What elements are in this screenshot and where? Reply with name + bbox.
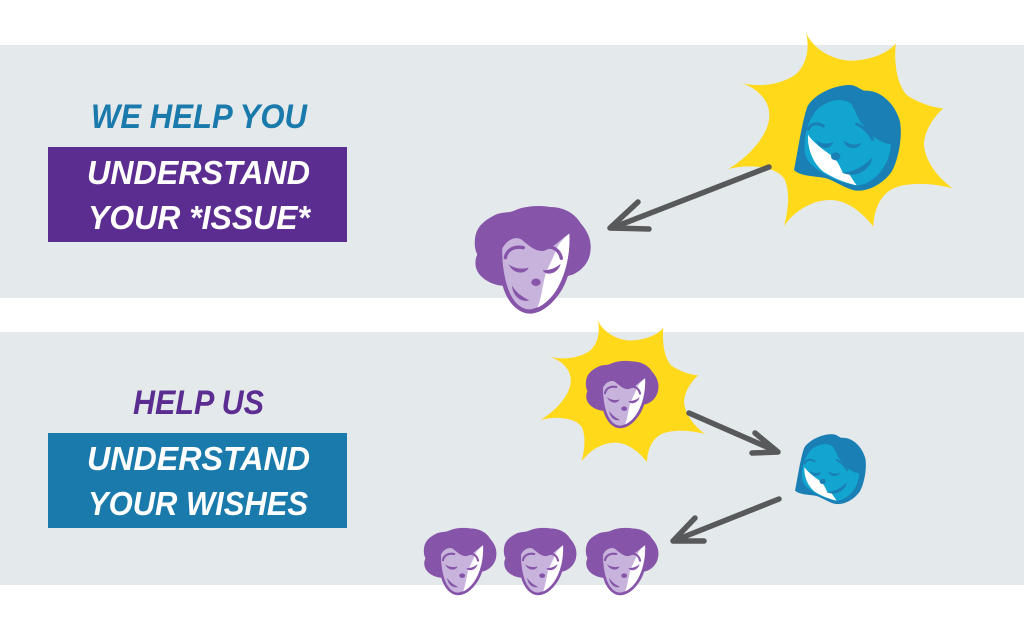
arrow: blue face to purple group xyxy=(673,499,779,541)
arrow: blue face to purple face xyxy=(610,167,769,229)
icon: purple face group xyxy=(424,528,658,595)
icon: blue face in large sun xyxy=(728,33,953,227)
arrow: purple face to blue face xyxy=(689,413,778,453)
heading: help us: HELP US xyxy=(133,384,264,422)
icon: sun behind small purple face xyxy=(541,320,705,462)
callout: understand your issue: YOUR *ISSUE* xyxy=(88,199,312,236)
callout: understand your wishes: YOUR WISHES xyxy=(88,485,308,522)
icon: purple face in small sun xyxy=(586,361,658,428)
callout: understand your issue: UNDERSTAND xyxy=(87,154,310,191)
icon: small blue face xyxy=(795,434,866,504)
callout: understand your wishes xyxy=(48,433,347,528)
panel: top band xyxy=(0,45,1024,298)
callout: understand your issue xyxy=(48,147,347,242)
icon: large purple face xyxy=(475,206,591,314)
callout: understand your wishes: UNDERSTAND xyxy=(87,440,310,477)
panel: bottom band xyxy=(0,332,1024,585)
heading: we help you: WE HELP YOU xyxy=(91,98,308,136)
